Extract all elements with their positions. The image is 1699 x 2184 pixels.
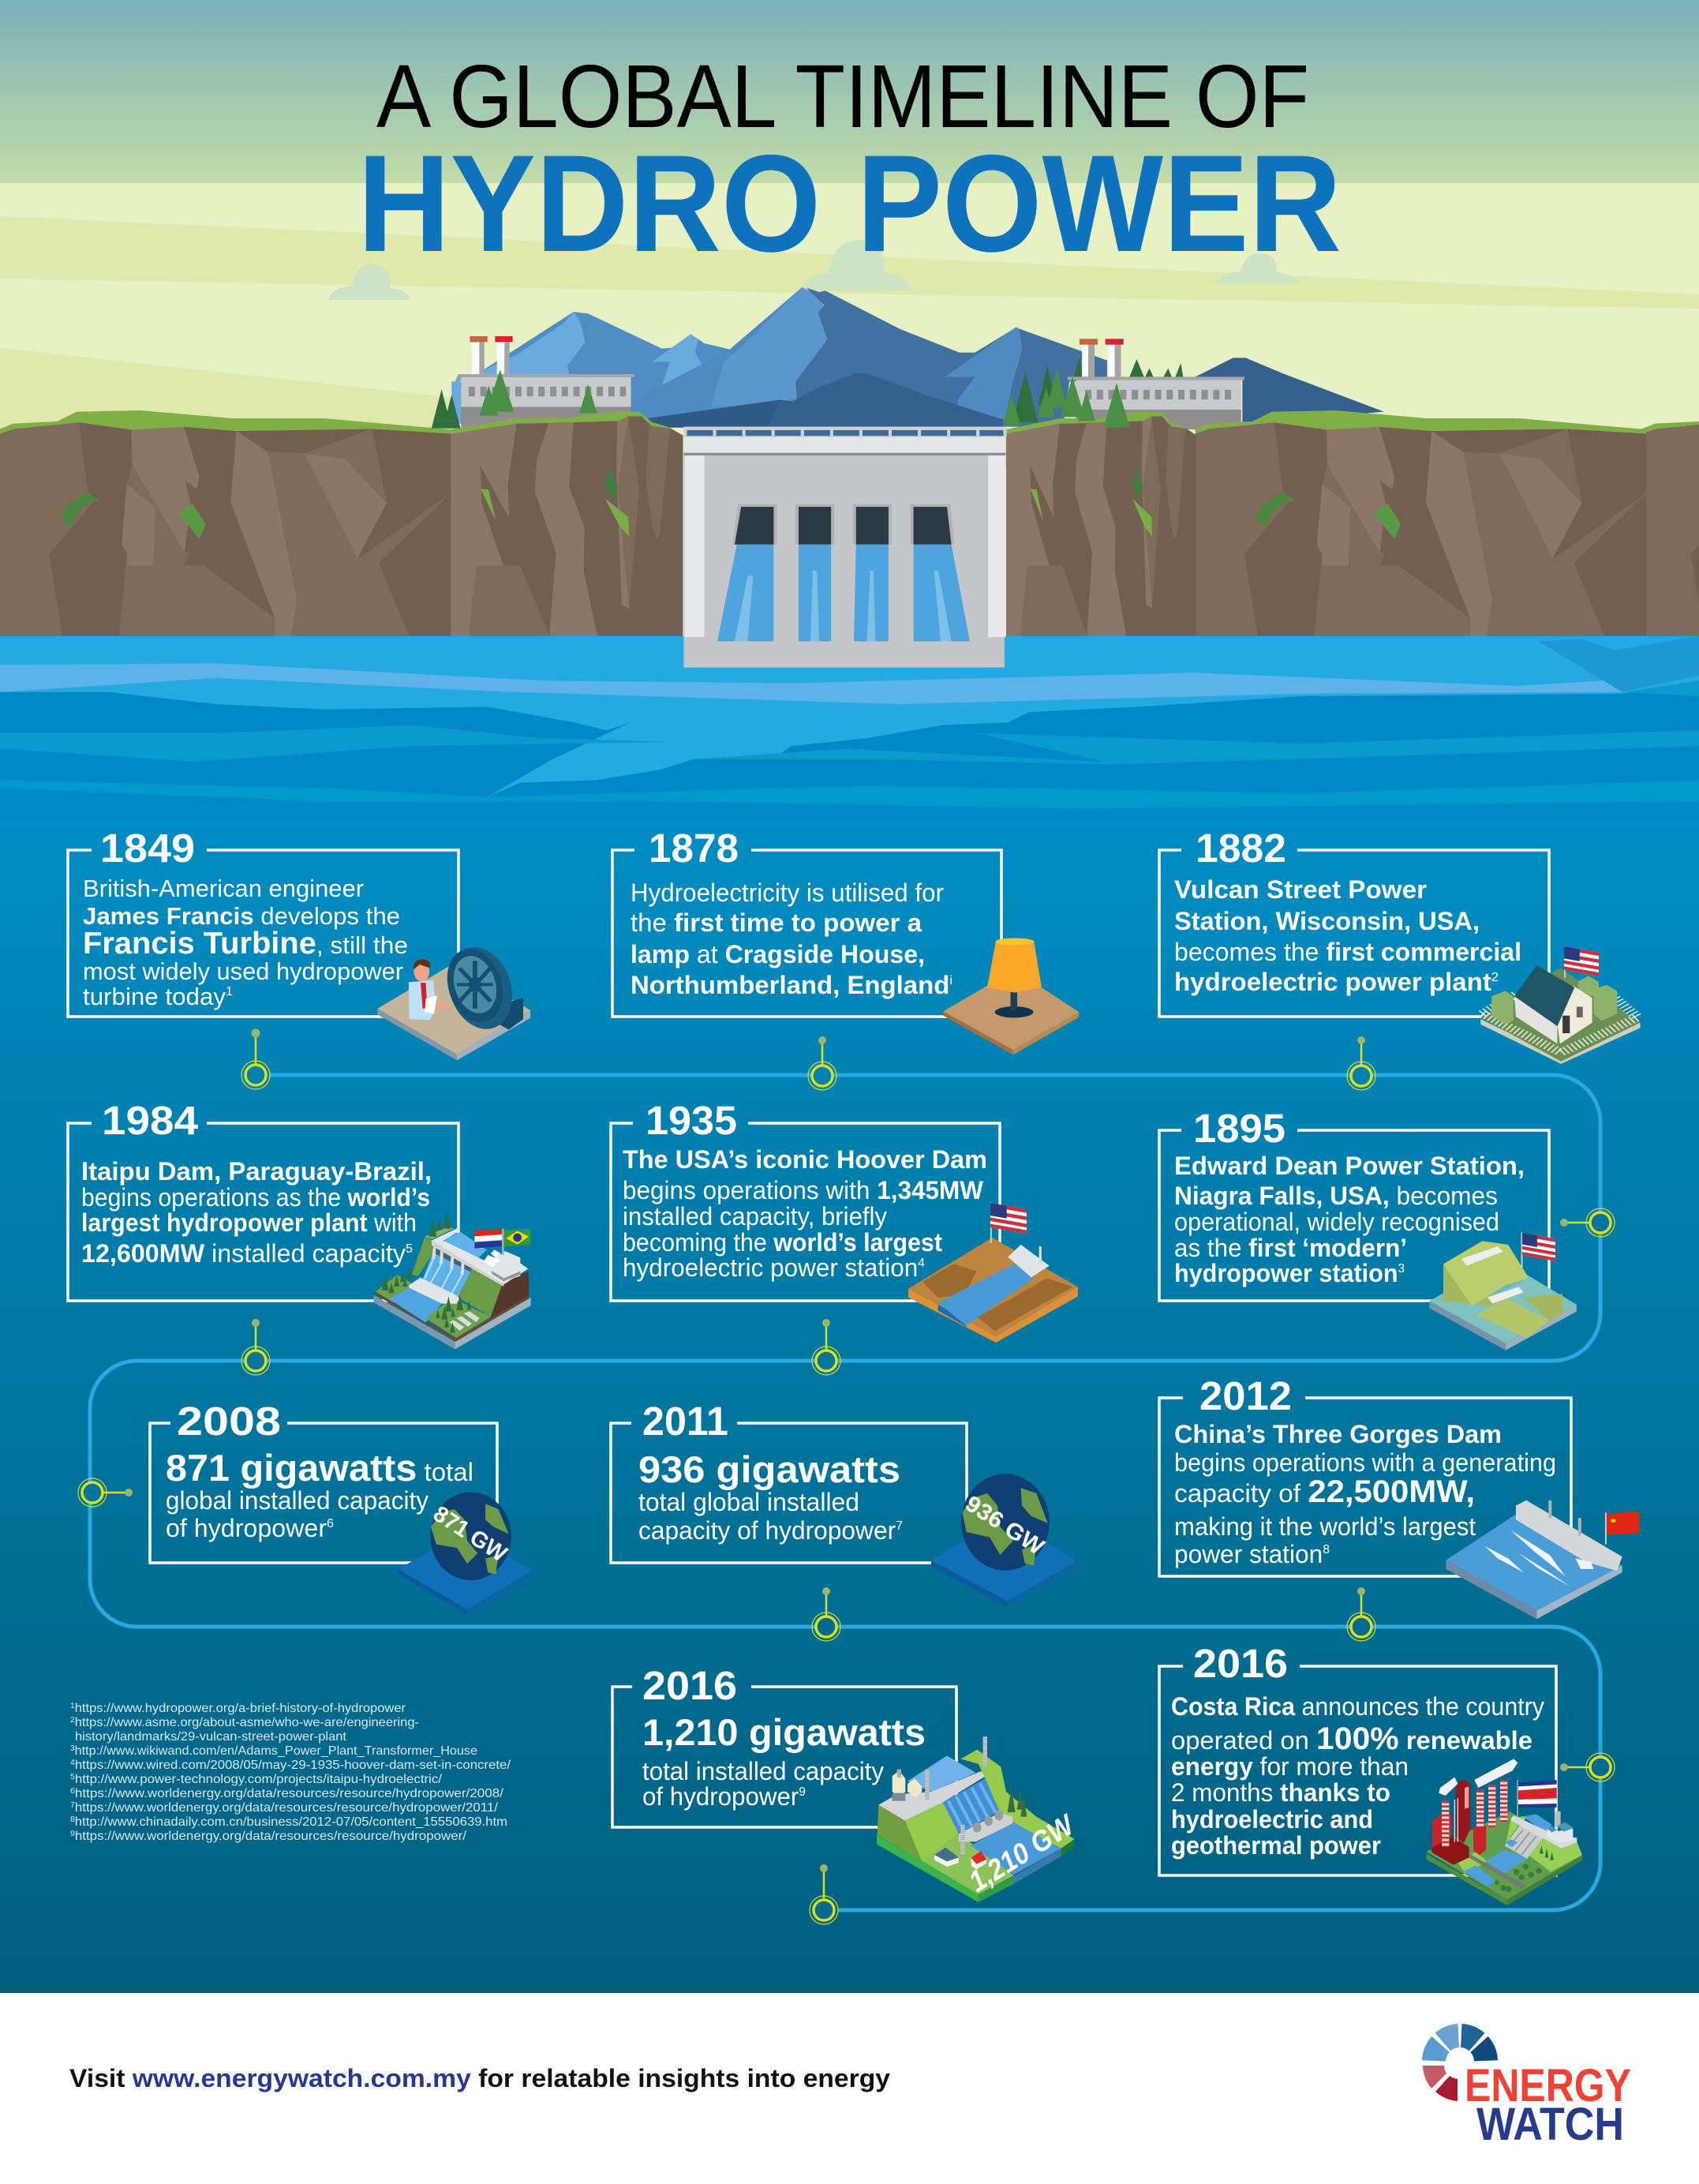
text 1882: becomes the first commercial: [1174, 938, 1521, 966]
text Costa Rica: Costa Rica announces the country: [1171, 1692, 1544, 1721]
title line 2: HYDRO POWER: [357, 127, 1342, 281]
text 1984: 12,600MW installed capacity: [81, 1239, 404, 1268]
text 1878: lamp at Cragside House,: [631, 940, 925, 968]
panel: 1882: [1159, 826, 1549, 1017]
panel: 1984: [68, 1098, 458, 1301]
text 2012: 8: [1323, 1543, 1330, 1557]
text 1849: Francis Turbine, still the: [83, 927, 408, 961]
timeline path: [90, 1075, 1600, 1910]
title: [357, 47, 1342, 281]
footnotes: history/landmarks/29-vulcan-street-power-plant: [75, 1730, 347, 1744]
text 2016 gigawatts: [642, 1711, 926, 1811]
footer band: [0, 1993, 1699, 2184]
year 2016: 2016: [1193, 1641, 1288, 1686]
footnotes: https://www.worldenergy.org/data/resources/resource/hydropower/2008/: [75, 1787, 504, 1800]
text 1882: [1174, 875, 1521, 996]
text 2012: making it the world’s largest: [1174, 1512, 1476, 1541]
cliffs and grass: [0, 410, 1699, 637]
text 2011: [638, 1448, 903, 1545]
panel: 2012: [1159, 1373, 1571, 1576]
footnotes: https://www.wired.com/2008/05/may-29-1935-hoover-dam-set-in-concrete/: [75, 1759, 511, 1772]
year 2016: 2016: [642, 1663, 737, 1708]
text 1895: as the first ‘modern’: [1174, 1234, 1407, 1262]
panel: 1895: [1159, 1106, 1549, 1301]
ocean background: [0, 821, 1699, 1993]
text 1935: becoming the world’s largest: [623, 1228, 942, 1257]
text 1882: Station, Wisconsin, USA,: [1174, 907, 1480, 935]
text 2008: global installed capacity: [166, 1486, 428, 1515]
text 1849: British-American engineer: [83, 875, 364, 902]
text 2008: 6: [327, 1517, 334, 1530]
trees: [432, 365, 1130, 429]
text 1878: Northumberland, England: [631, 971, 949, 999]
smoke: [1439, 1759, 1517, 1796]
text 2008: 871 gigawatts total: [166, 1447, 473, 1489]
gates: [717, 504, 970, 642]
text Costa Rica: 2 months thanks to: [1171, 1778, 1390, 1807]
text 1984: begins operations as the world’s: [81, 1183, 430, 1212]
text 2012: capacity of 22,500MW,: [1174, 1474, 1475, 1509]
text 1935: [623, 1145, 987, 1282]
footnotes: 2: [70, 1716, 75, 1725]
logo word WATCH: WATCH: [1476, 2099, 1624, 2150]
icon: Edward Dean station with flag: [1429, 1232, 1577, 1350]
logo word ENERGY: ENERGY: [1465, 2060, 1631, 2111]
panel: 2008: [150, 1399, 497, 1563]
text 2012: begins operations with a generating: [1174, 1448, 1556, 1477]
footnotes: 1: [70, 1702, 75, 1710]
text 2011: 936 gigawatts: [638, 1448, 900, 1490]
text 2016 gigawatts: total installed capacity: [642, 1757, 884, 1785]
text 2011: total global installed: [638, 1488, 859, 1516]
text 1849: [83, 875, 408, 1010]
text Costa Rica: geothermal power: [1171, 1831, 1381, 1860]
text 1935: installed capacity, briefly: [623, 1202, 887, 1231]
year 1882: 1882: [1196, 826, 1286, 871]
flag: Brazil: [504, 1229, 531, 1247]
year 1878: 1878: [649, 826, 739, 871]
flag: Paraguay: [474, 1229, 502, 1249]
text 2011: 7: [896, 1519, 903, 1533]
text 2012: power station: [1174, 1540, 1324, 1568]
icon: globe 936 GW: 936 GW: [960, 1491, 1049, 1560]
icon: lamp: [943, 938, 1079, 1055]
footnotes: https://www.worldenergy.org/data/resources/resource/hydropower/: [75, 1830, 467, 1843]
flag: Costa Rica: [1518, 1780, 1557, 1808]
text 1895: operational, widely recognised: [1174, 1208, 1499, 1236]
footnotes: 9: [70, 1830, 75, 1838]
footnotes: https://www.hydropower.org/a-brief-history-of-hydropower: [75, 1702, 406, 1715]
text 1984: [81, 1157, 432, 1268]
icon: dam 1,210 GW: 1,210 GW: [964, 1808, 1081, 1898]
footnotes: 6: [70, 1787, 75, 1796]
footnotes: 8: [70, 1815, 75, 1824]
panel: 1878: [612, 826, 1001, 1017]
text 1935: The USA’s iconic Hoover Dam: [623, 1145, 987, 1174]
year 2008: 2008: [177, 1399, 281, 1444]
footnotes: 3: [70, 1744, 75, 1753]
text 1935: 4: [918, 1257, 925, 1270]
text 1984: Itaipu Dam, Paraguay-Brazil,: [81, 1157, 432, 1186]
title line 1: A GLOBAL TIMELINE OF: [376, 47, 1309, 146]
clouds: [328, 240, 1297, 300]
year 1935: 1935: [646, 1098, 737, 1143]
logo wheel: [1422, 2024, 1498, 2101]
text 2011: capacity of hydropower: [638, 1516, 898, 1545]
text 2016 gigawatts: of hydropower: [642, 1782, 803, 1811]
text Costa Rica: operated on 100% renewable: [1171, 1721, 1532, 1756]
icon: Three Gorges dam with flag: [1446, 1500, 1639, 1619]
footnotes: 4: [70, 1759, 75, 1767]
dam: [683, 427, 1007, 668]
year 2011: 2011: [642, 1399, 728, 1444]
text 1935: begins operations with 1,345MW: [623, 1176, 984, 1204]
mountains: [451, 287, 1384, 428]
panel: 1935: [611, 1098, 1000, 1301]
factory left: [458, 336, 634, 428]
panel: 1849: [68, 826, 458, 1017]
footnotes: http://www.wikiwand.com/en/Adams_Power_Plant_Transformer_House: [75, 1744, 477, 1758]
year 2012: 2012: [1199, 1373, 1292, 1418]
icon: globe 936 GW: [931, 1474, 1077, 1607]
text 1878: the first time to power a: [631, 908, 922, 937]
text Costa Rica: [1171, 1692, 1544, 1860]
text 1895: Edward Dean Power Station,: [1174, 1152, 1525, 1180]
year 1984: 1984: [102, 1098, 199, 1143]
icon: dam 1,210 GW: [877, 1736, 1081, 1902]
red factory: [1431, 1780, 1504, 1865]
footnotes: http://www.chinadaily.com.cn/business/2012-07/05/content_15550639.htm: [75, 1815, 507, 1829]
panel: 2016 gigawatts: [612, 1663, 956, 1827]
year 1895: 1895: [1193, 1106, 1285, 1151]
text 1882: Vulcan Street Power: [1174, 875, 1427, 904]
footnotes: 7: [70, 1801, 75, 1810]
logo: Energy Watch: [1422, 2024, 1631, 2150]
icon: globe 871 GW: [399, 1493, 532, 1615]
text Costa Rica: energy for more than: [1171, 1752, 1409, 1781]
text Costa Rica: hydroelectric and: [1171, 1805, 1373, 1834]
text 2012: [1174, 1420, 1556, 1568]
text 1984: largest hydropower plant with: [81, 1208, 417, 1237]
water surface: [0, 636, 1699, 821]
text 1849: 1: [226, 985, 233, 998]
text 2016 gigawatts: 1,210 gigawatts: [642, 1711, 926, 1753]
footnotes: https://www.worldenergy.org/data/resources/resource/hydropower/2011/: [75, 1801, 499, 1815]
footnotes: http://www.power-technology.com/projects/itaipu-hydroelectric/: [75, 1773, 443, 1786]
text 1849: James Francis develops the: [83, 902, 400, 930]
icon: Hoover dam with flag: [908, 1202, 1078, 1343]
footnotes: https://www.asme.org/about-asme/who-we-are/engineering-: [75, 1716, 419, 1729]
footer call to action: Visit www.energywatch.com.my for relatable insights into energy: [69, 2064, 890, 2092]
footnotes: [70, 1702, 511, 1843]
background: sky: [0, 0, 1699, 467]
icon: globe 871 GW: 871 GW: [428, 1501, 511, 1568]
icon: Itaipu dam with flags: [373, 1212, 531, 1349]
text 1895: hydropower station: [1174, 1259, 1398, 1287]
text 1878: [631, 878, 952, 999]
text 1895: Niagra Falls, USA, becomes: [1174, 1182, 1498, 1210]
text 2016 gigawatts: 9: [799, 1785, 806, 1799]
flag: China: [1607, 1512, 1639, 1535]
text 1984: 5: [406, 1242, 413, 1256]
timeline nodes: [78, 1029, 1615, 1924]
text 1882: hydroelectric power plant: [1174, 968, 1491, 996]
icon: house with flag: [1480, 946, 1641, 1064]
text 1882: 2: [1491, 971, 1499, 984]
text 1849: turbine today: [83, 983, 224, 1010]
text 1849: most widely used hydropower: [83, 957, 403, 985]
panel: 2016 Costa Rica: [1159, 1641, 1556, 1875]
icon: turbine and engineer: [377, 944, 530, 1060]
text 1935: hydroelectric power station: [623, 1253, 923, 1282]
icon: Costa Rica energy park: [1426, 1759, 1582, 1905]
text 2008: of hydropower: [166, 1514, 326, 1542]
panel: 2011: [611, 1399, 967, 1563]
text 2008: [166, 1447, 473, 1542]
text 1895: [1174, 1152, 1525, 1287]
text 2012: China’s Three Gorges Dam: [1174, 1420, 1502, 1448]
text 1895: 3: [1398, 1262, 1405, 1276]
factory right: [1068, 339, 1244, 429]
year 1849: 1849: [100, 826, 195, 871]
text 1878: Hydroelectricity is utilised for: [631, 878, 944, 907]
text 1878: i: [949, 974, 952, 987]
footnotes: 5: [70, 1773, 75, 1781]
